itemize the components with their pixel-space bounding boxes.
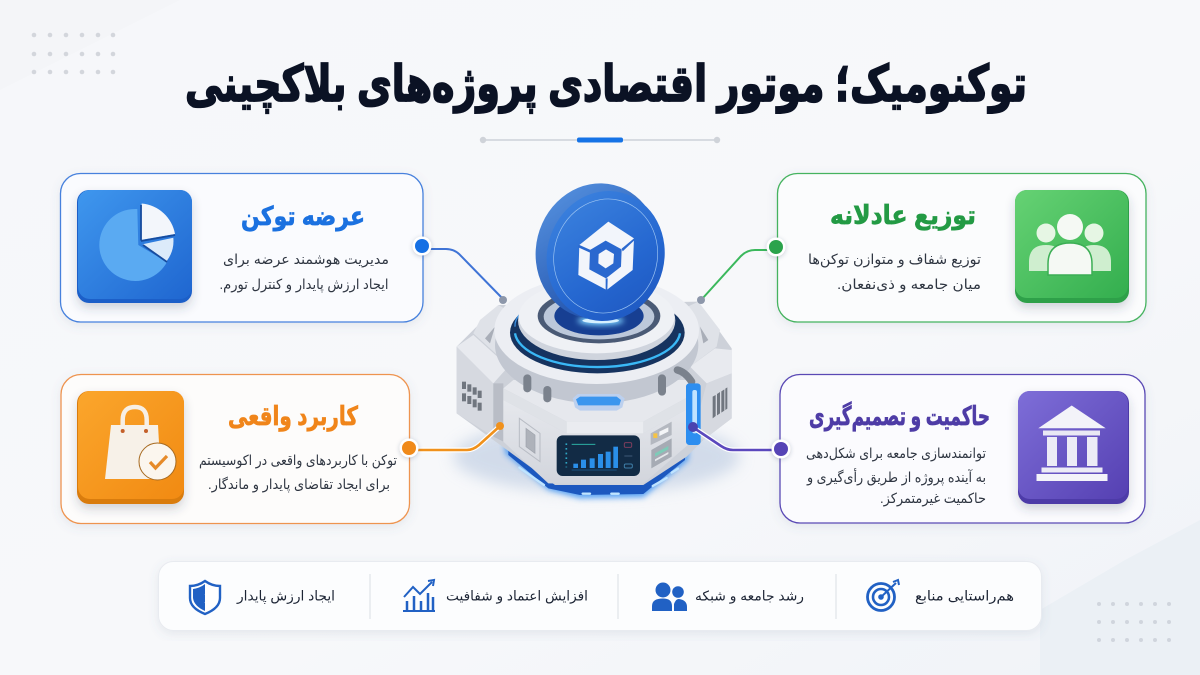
heading: حاکمیت و تصمیم‌گیری — [809, 401, 990, 432]
connector: orange — [415, 422, 504, 450]
benefit: aligned interests: هم‌راستایی منابع — [915, 588, 1014, 604]
icon: people — [652, 582, 687, 611]
text block: به آینده پروژه از طریق رأی‌گیری و — [806, 468, 986, 486]
icon: shopping bag — [77, 391, 184, 504]
text block: میان جامعه و ذی‌نفعان. — [837, 276, 981, 293]
benefit: community growth: رشد جامعه و شبکه — [695, 588, 804, 604]
decorative dots: top left — [32, 33, 115, 74]
text block — [808, 251, 981, 293]
text block — [199, 452, 397, 493]
central machine illustration — [453, 170, 740, 498]
machine pipes — [527, 370, 692, 398]
machine base light strips — [519, 468, 678, 494]
icon: institution — [1018, 391, 1129, 504]
decorative dots: bottom right — [1097, 602, 1171, 642]
benefit: lasting value: ایجاد ارزش پایدار — [236, 588, 335, 604]
machine wings — [457, 302, 732, 485]
text block: ایجاد ارزش پایدار و کنترل تورم. — [220, 276, 388, 293]
benefit: lasting value — [190, 581, 335, 614]
icon: target — [868, 580, 899, 610]
icon: shield — [190, 581, 220, 614]
machine blue side tube — [686, 383, 701, 445]
text block: مدیریت هوشمند عرضه برای — [223, 251, 389, 268]
benefit: trust and transparency: افزایش اعتماد و شفافیت — [446, 588, 588, 604]
benefit: trust and transparency — [403, 580, 588, 611]
text block: حاکمیت غیرمتمرکز. — [880, 490, 986, 507]
machine screen chart — [557, 435, 640, 476]
heading: کاربرد واقعی — [228, 401, 359, 432]
connector: purple — [688, 422, 776, 450]
heading: عرضه توکن — [241, 201, 365, 232]
connector: blue — [428, 249, 507, 304]
panel: token supply — [60, 174, 423, 322]
text block: توکن با کاربردهای واقعی در اکوسیستم — [199, 452, 397, 469]
text block: توزیع شفاف و متوازن توکن‌ها — [808, 251, 981, 268]
machine front housing — [493, 380, 692, 485]
connector dots — [400, 236, 790, 458]
icon: community — [1015, 190, 1129, 303]
text block: توانمندسازی جامعه برای شکل‌دهی — [806, 445, 986, 462]
heading: توزیع عادلانه — [830, 200, 976, 231]
coin logo — [578, 222, 634, 291]
benefit: aligned interests — [868, 580, 1014, 610]
machine ring platform — [494, 276, 699, 403]
panel: governance — [780, 374, 1145, 523]
machine status panels — [651, 422, 672, 468]
text block — [806, 445, 986, 507]
text block: برای ایجاد تقاضای پایدار و ماندگار. — [208, 476, 390, 493]
title divider — [480, 137, 720, 143]
icon: pie chart — [77, 190, 192, 303]
text block — [220, 251, 389, 293]
machine lamp — [573, 394, 625, 411]
icon: rising chart — [403, 580, 435, 611]
connector: green — [697, 250, 771, 304]
panel: fair distribution — [778, 174, 1146, 322]
panel: benefits bar — [158, 562, 1042, 630]
coin — [521, 170, 678, 334]
machine vents — [462, 382, 727, 418]
benefit: community growth — [652, 582, 804, 611]
panel: real use — [61, 374, 410, 524]
machine base glow — [505, 437, 688, 498]
